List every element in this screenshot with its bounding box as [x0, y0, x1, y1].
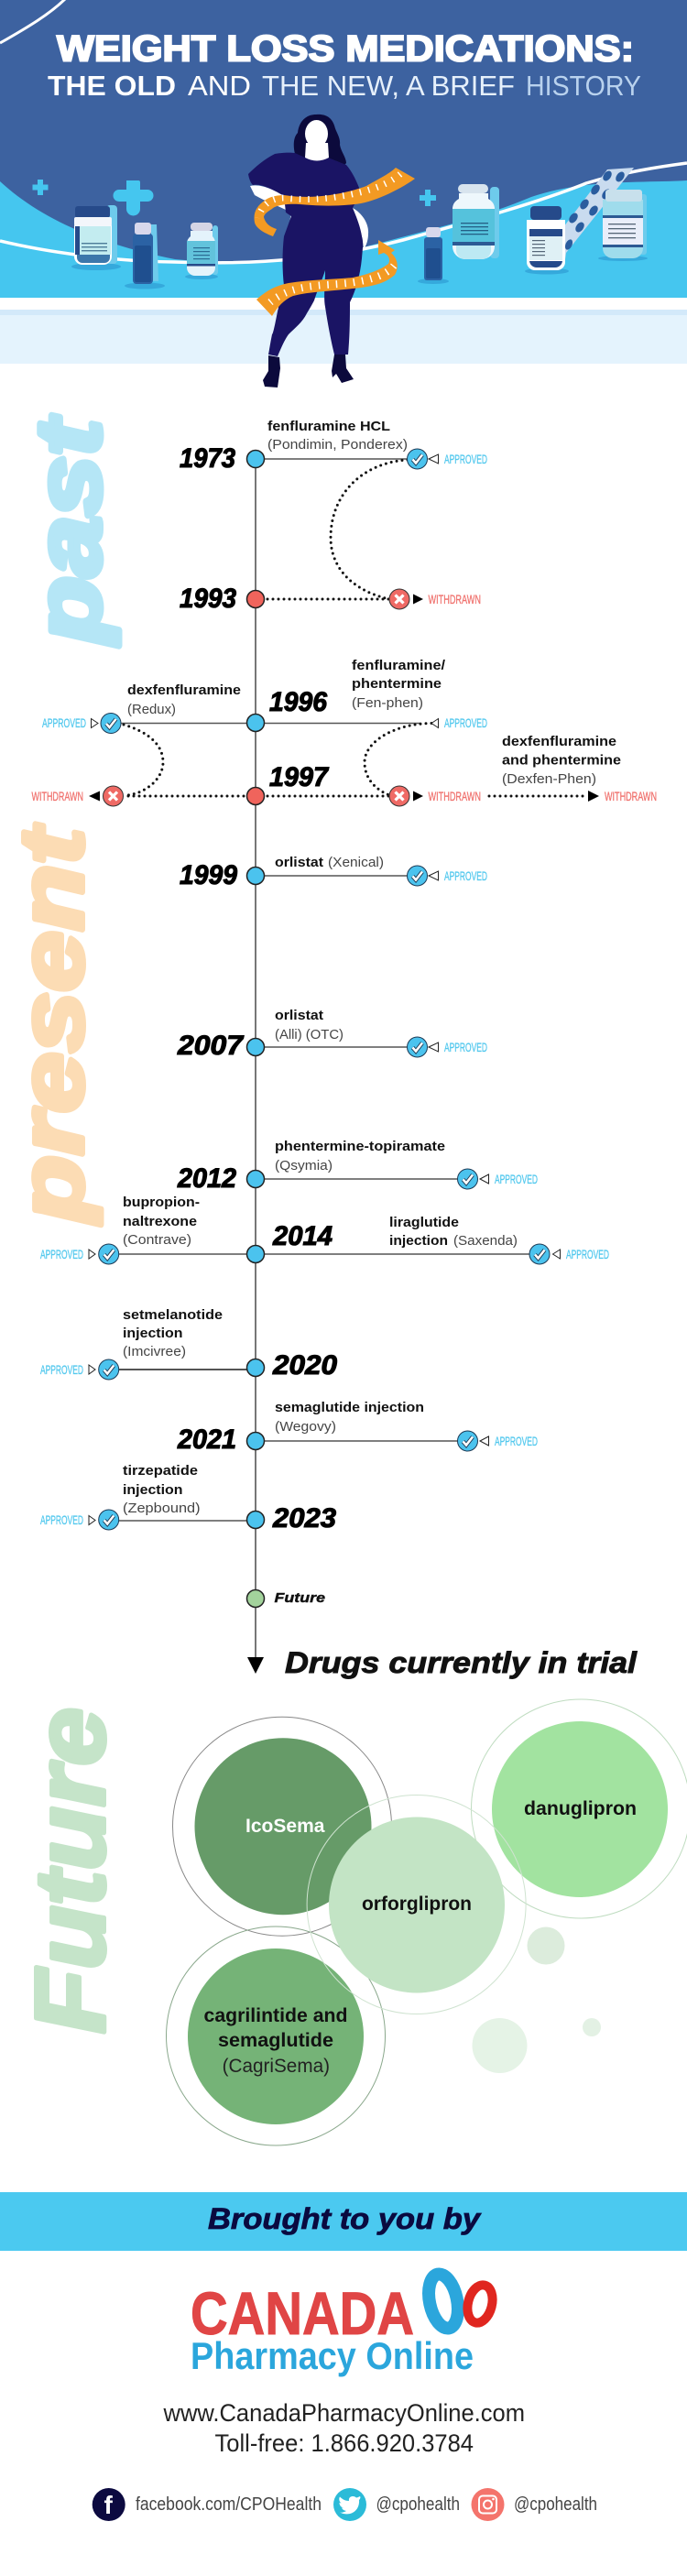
social: twitter: @cpohealth — [376, 2494, 460, 2515]
1996 entry: 1996 — [269, 687, 327, 717]
2012 entry: 2012 — [177, 1163, 236, 1194]
2021 entry: semaglutide injection — [275, 1400, 424, 1415]
2020 entry — [40, 1307, 337, 1381]
1997 entry: WITHDRAWN — [31, 789, 83, 803]
1993 entry — [180, 584, 481, 614]
future node: Future — [275, 1590, 325, 1606]
logo: Canada Pharmacy Online: Pharmacy Online — [191, 2334, 474, 2377]
1997 entry: WITHDRAWN — [605, 789, 657, 803]
2023 entry: tirzepatide — [123, 1463, 198, 1479]
1997 entry: 1997 — [269, 762, 329, 792]
1997 entry: (Dexfen-Phen) — [502, 771, 596, 787]
2014 entry: (Contrave) — [123, 1232, 191, 1248]
1999 entry: orlistat — [275, 855, 323, 870]
2023 entry — [40, 1463, 336, 1534]
drug circle: cagrilintide and semaglutide: (CagriSema) — [223, 2056, 330, 2077]
measuring tape — [255, 168, 415, 316]
1996 entry: APPROVED — [444, 715, 487, 730]
header background — [0, 0, 687, 364]
2021 entry: APPROVED — [495, 1434, 538, 1448]
1973 entry — [180, 419, 487, 599]
banner: brought to you by: Brought to you by — [208, 2202, 482, 2235]
logo: Canada Pharmacy Online — [191, 2272, 496, 2377]
heading: past: past — [17, 416, 120, 647]
timeline axis — [247, 458, 264, 1674]
2012 entry: phentermine-topiramate — [275, 1139, 445, 1154]
drug circle: IcoSema: IcoSema — [245, 1816, 325, 1837]
contact details — [163, 2399, 525, 2457]
decorative small circles — [473, 1927, 601, 2073]
1999 entry: (Xenical) — [328, 855, 384, 870]
1973 entry: (Pondimin, Ponderex) — [267, 437, 408, 453]
1996 entry: fenfluramine/ — [352, 658, 446, 673]
heading: future: Future — [15, 1708, 125, 2034]
title: WEIGHT LOSS MEDICATIONS: — [57, 29, 634, 70]
banner: brought to you by — [0, 2192, 687, 2251]
social: facebook — [93, 2488, 322, 2521]
1993 entry: WITHDRAWN — [429, 592, 481, 606]
drug circle: IcoSema — [172, 1717, 392, 1936]
2020 entry: APPROVED — [40, 1362, 83, 1377]
2014 entry: naltrexone — [123, 1214, 197, 1229]
drug circle: orforglipron — [307, 1796, 526, 2014]
drug circle: orforglipron: orforglipron — [362, 1894, 472, 1915]
drug circle: cagrilintide and semaglutide: cagrilintide and — [203, 2005, 348, 2026]
1997 entry: and phentermine — [502, 753, 621, 768]
2023 entry: 2023 — [272, 1503, 336, 1534]
2012 entry: (Qsymia) — [275, 1158, 333, 1173]
1996 entry: dexfenfluramine — [127, 682, 241, 698]
2014 entry: APPROVED — [40, 1247, 83, 1261]
2014 entry: (Saxenda) — [453, 1233, 518, 1249]
2012 entry — [177, 1139, 538, 1194]
2021 entry: 2021 — [177, 1424, 236, 1455]
1973 entry: 1973 — [180, 443, 235, 474]
1996 entry — [42, 658, 487, 795]
heading: present: present — [1, 824, 102, 1226]
2007 entry: orlistat — [275, 1008, 323, 1023]
social: instagram: @cpohealth — [514, 2494, 597, 2515]
1973 entry: APPROVED — [444, 452, 487, 466]
1996 entry: (Fen-phen) — [352, 695, 423, 711]
contact details: www.CanadaPharmacyOnline.com — [163, 2399, 525, 2427]
2007 entry: (Alli) (OTC) — [275, 1027, 344, 1042]
drug circle: danuglipron: danuglipron — [524, 1798, 637, 1819]
drug circle: cagrilintide and semaglutide: semaglutide — [218, 2030, 333, 2051]
1993 entry: 1993 — [180, 584, 236, 614]
1997 entry: WITHDRAWN — [429, 789, 481, 803]
social: instagram — [471, 2488, 597, 2521]
2007 entry: 2007 — [177, 1031, 244, 1061]
2007 entry: APPROVED — [444, 1040, 487, 1054]
title: THE OLD — [48, 70, 176, 102]
drug circle: danuglipron — [471, 1699, 687, 1918]
drug circle: cagrilintide and semaglutide — [167, 1927, 385, 2145]
2020 entry: 2020 — [272, 1350, 337, 1381]
illustration: medicine bottles and blister pack right — [418, 168, 648, 284]
social: facebook: f — [104, 2491, 114, 2519]
icon: plus signs — [33, 180, 436, 216]
title: AND — [188, 70, 251, 102]
1996 entry: (Redux) — [127, 702, 176, 717]
1997 entry — [31, 734, 657, 806]
2021 entry — [177, 1400, 538, 1455]
2021 entry: (Wegovy) — [275, 1419, 336, 1435]
heading: drugs currently in trial: Drugs currently in trial — [285, 1646, 638, 1679]
social: facebook: facebook.com/CPOHealth — [136, 2494, 322, 2515]
title — [48, 29, 641, 102]
2014 entry: APPROVED — [566, 1247, 609, 1261]
2020 entry: (Imcivree) — [123, 1344, 186, 1359]
contact details: Toll-free: 1.866.920.3784 — [214, 2429, 474, 2457]
2012 entry: APPROVED — [495, 1172, 538, 1186]
1999 entry — [180, 855, 487, 890]
1996 entry: phentermine — [352, 676, 442, 692]
title: THE NEW, A BRIEF — [262, 70, 515, 102]
2007 entry — [177, 1008, 487, 1061]
2023 entry: APPROVED — [40, 1512, 83, 1527]
1996 entry: APPROVED — [42, 715, 86, 730]
2014 entry: liraglutide — [389, 1215, 459, 1230]
2014 entry: 2014 — [272, 1221, 333, 1251]
future node — [247, 1590, 325, 1607]
2014 entry: bupropion- — [123, 1195, 200, 1210]
2020 entry: setmelanotide — [123, 1307, 223, 1323]
2023 entry: injection — [123, 1482, 183, 1498]
social: twitter — [333, 2488, 460, 2521]
2020 entry: injection — [123, 1326, 183, 1341]
illustration: woman with measuring tape — [248, 115, 415, 387]
2023 entry: (Zepbound) — [123, 1501, 201, 1516]
illustration: medicine bottles left — [71, 205, 218, 289]
2014 entry: injection — [389, 1233, 448, 1249]
1999 entry: APPROVED — [444, 868, 487, 883]
2014 entry — [40, 1195, 609, 1264]
1973 entry: fenfluramine HCL — [267, 419, 390, 434]
1999 entry: 1999 — [180, 860, 237, 890]
title: HISTORY — [526, 70, 641, 102]
logo: Canada Pharmacy Online: CANADA — [191, 2279, 414, 2347]
1997 entry: dexfenfluramine — [502, 734, 616, 749]
